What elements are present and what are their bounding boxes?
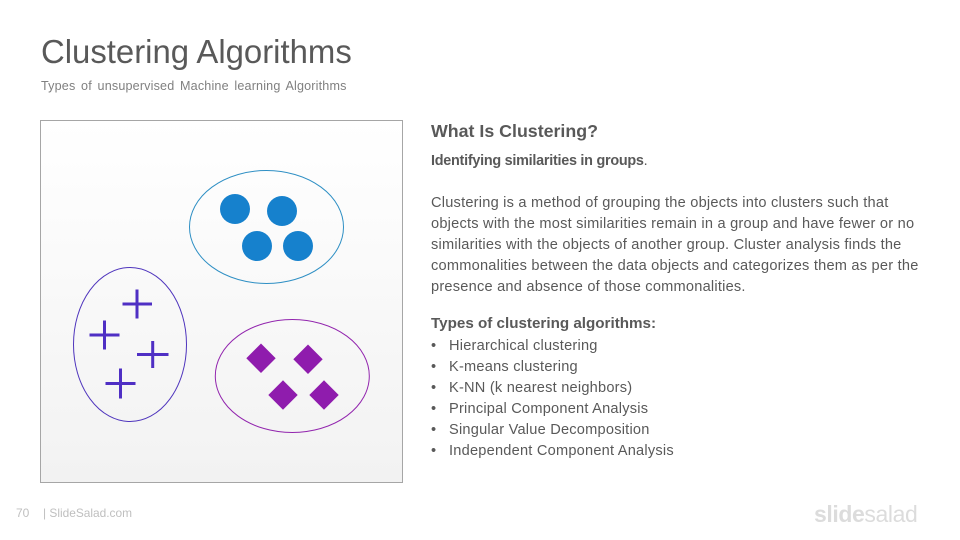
footer source: | SlideSalad.com [43,506,132,520]
body paragraph: objects with the most similarities remain in a group and have fewer or no [431,216,914,232]
bullet list: Singular Value Decomposition [449,422,650,438]
bullet list: K-means clustering [449,359,578,375]
title: Clustering Algorithms [41,33,352,70]
bullet list: • [431,401,436,417]
logo wordmark: slidesalad [814,501,917,527]
cluster: purple diamonds [215,320,369,432]
bullet list: • [431,422,436,438]
bullet list: K-NN (k nearest neighbors) [449,380,632,396]
bullet list: Independent Component Analysis [449,443,674,459]
bullet list [431,338,674,459]
heading: types of clustering algorithms: Types of clustering algorithms: [431,315,656,332]
page number: 70 [16,506,29,520]
subtitle: Types of unsupervised Machine learning Algorithms [41,79,347,93]
body paragraph: similarities with the objects of another group. Cluster analysis finds the [431,237,902,253]
bullet list: • [431,359,436,375]
body paragraph: commonalities between the data objects and categorizes them as per the [431,258,919,274]
heading: what is clustering: What Is Clustering? [431,121,598,141]
cluster: violet plus signs [74,268,186,422]
bullet list: Principal Component Analysis [449,401,648,417]
cluster: blue circles [190,170,344,284]
bullet list: Hierarchical clustering [449,338,598,354]
bullet list: • [431,380,436,396]
bullet list: • [431,443,436,459]
body paragraph [431,195,919,295]
body paragraph: presence and absence of those commonalities. [431,279,746,295]
bullet list: • [431,338,436,354]
body paragraph: Clustering is a method of grouping the objects into clusters such that [431,195,889,211]
bold definition line: Identifying similarities in groups. [431,153,648,169]
